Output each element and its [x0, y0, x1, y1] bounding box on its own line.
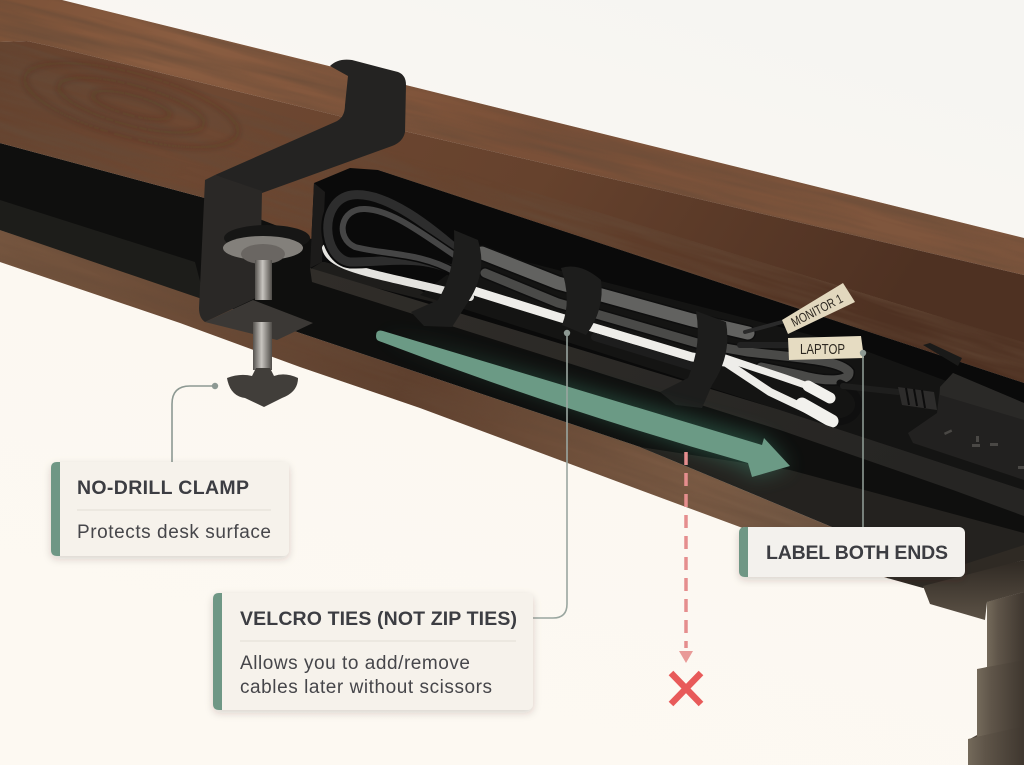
lower wood edge of desk [0, 230, 887, 578]
tag: Laptop [788, 336, 864, 360]
dashed red arrow (wrong way) [679, 452, 693, 663]
channel rail lower strip [0, 200, 205, 300]
callout: label both ends: LABEL BOTH ENDS [766, 542, 948, 564]
routing arrow (green) [376, 331, 790, 477]
black under-desk channel [0, 143, 1024, 572]
channel lower grey band [640, 447, 1024, 572]
clamp top hook [215, 60, 406, 193]
callout: no-drill clamp: Protects desk surface [77, 522, 271, 543]
tray floor [420, 250, 1024, 490]
callout: no-drill clamp: NO-DRILL CLAMP [77, 477, 249, 499]
tag: Monitor 1: MONITOR 1 [789, 291, 845, 330]
callout: label both ends [739, 527, 965, 577]
desk leg and mounting bracket [860, 525, 1024, 765]
tag: Laptop: LAPTOP [800, 341, 845, 358]
power strip [898, 343, 1024, 480]
threaded rod lower [253, 322, 272, 370]
leader: labels [860, 350, 866, 528]
callout: velcro ties: VELCRO TIES (NOT ZIP TIES) [240, 608, 517, 630]
pressure disc [224, 225, 310, 251]
desk front face [0, 41, 1024, 383]
no-drill clamp [199, 60, 406, 407]
callout: velcro ties: Allows you to add/remove [240, 653, 470, 674]
callout: velcro ties [213, 593, 533, 710]
velcro ties [411, 230, 727, 408]
desk top surface [0, 0, 1024, 275]
red X mark [671, 673, 701, 704]
cable bundle [326, 195, 898, 422]
callout: velcro ties: cables later without scissors [240, 677, 492, 698]
callout: no-drill clamp [51, 462, 289, 556]
leader: velcro [533, 330, 570, 618]
threaded rod [255, 260, 272, 300]
clamp plate [199, 175, 262, 322]
clamp lower plate [205, 300, 313, 340]
leader: clamp [172, 383, 218, 462]
tray front lip [310, 268, 1024, 516]
cable tray [310, 168, 1024, 516]
wing nut [227, 368, 298, 407]
